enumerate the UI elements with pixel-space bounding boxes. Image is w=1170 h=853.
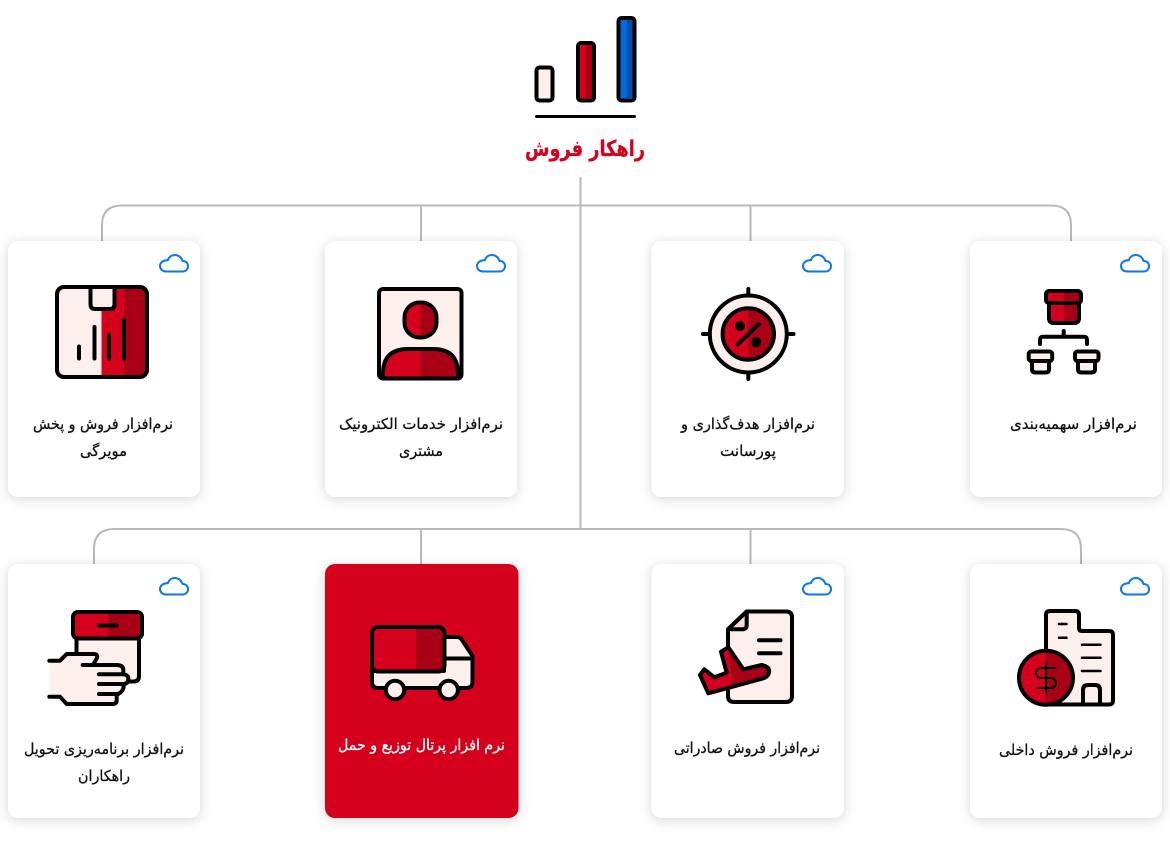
connector lines xyxy=(94,177,1081,564)
icon: cloud xyxy=(160,578,188,594)
label: مویرگی xyxy=(80,442,127,460)
icon: cloud xyxy=(477,255,505,272)
icon: cloud xyxy=(1121,255,1149,272)
label: نرم‌افزار هدف‌گذاری و xyxy=(680,415,815,433)
card: solution delivery planning software xyxy=(8,564,200,818)
icon: document with plane xyxy=(700,612,792,702)
icon: cloud xyxy=(803,578,831,594)
card: quota allocation software xyxy=(970,241,1162,497)
card: electronic customer service software xyxy=(325,241,517,497)
label: نرم‌افزار فروش و پخش xyxy=(33,415,173,434)
card: export sales software xyxy=(652,564,844,818)
label: مشتری xyxy=(399,442,443,460)
card: distribution portal software (highlighted) xyxy=(325,564,518,818)
card: distribution sales software xyxy=(8,241,200,497)
title: راهکار فروش xyxy=(525,137,645,162)
icon: hand holding box xyxy=(49,612,142,704)
icon: hierarchy of pots xyxy=(1029,291,1098,372)
label: نرم‌افزار خدمات الکترونیک xyxy=(339,415,503,433)
label: نرم‌افزار سهمیه‌بندی xyxy=(1010,415,1137,433)
label: راهکاران xyxy=(78,767,130,785)
label xyxy=(339,415,503,460)
label: نرم‌افزار فروش صادراتی xyxy=(674,739,820,757)
icon: customer portrait xyxy=(379,289,462,378)
icon: cloud xyxy=(803,255,831,272)
label: نرم‌افزار فروش داخلی xyxy=(999,741,1133,759)
card: domestic sales software xyxy=(970,564,1162,818)
icon: building with coin xyxy=(1019,611,1113,705)
icon: target with percent xyxy=(703,289,794,379)
card: target and commission software xyxy=(652,241,844,497)
icon: truck xyxy=(372,627,472,699)
label xyxy=(24,740,184,785)
label: پورسانت xyxy=(720,442,776,461)
icon: package with bars xyxy=(57,287,147,377)
label xyxy=(33,415,173,460)
icon: cloud xyxy=(160,255,188,272)
label: نرم افزار پرتال توزیع و حمل xyxy=(338,736,505,755)
icon: cloud xyxy=(1121,578,1149,594)
header icon: bar chart xyxy=(536,18,634,116)
label xyxy=(680,415,815,461)
label: نرم‌افزار برنامه‌ریزی تحویل xyxy=(24,740,184,758)
